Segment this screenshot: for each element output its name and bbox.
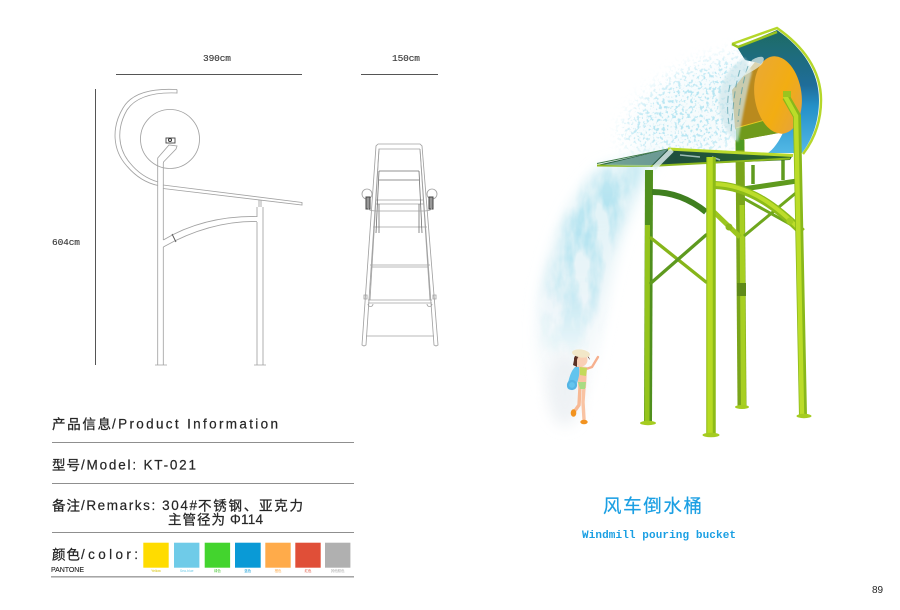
bucket disk — [749, 53, 807, 137]
curved hood outline — [115, 89, 177, 186]
bucket wheel circle — [140, 110, 200, 168]
heading: 产品信息 — [52, 416, 111, 432]
main pole — [155, 163, 167, 365]
model: 型号 — [52, 458, 80, 473]
remarks: 主管径为 — [168, 512, 225, 528]
dark arched brace — [652, 192, 706, 212]
remarks — [52, 498, 303, 528]
water shadow behind child — [547, 354, 583, 426]
deck — [597, 149, 793, 168]
left cross brace — [651, 235, 706, 283]
product illustration — [537, 28, 821, 437]
colour swatches: 绿色 — [214, 568, 221, 573]
colour swatches: 其他颜色 — [331, 568, 345, 573]
model: /Model: KT-021 — [81, 458, 196, 472]
product name: 风车倒水桶 — [603, 496, 702, 516]
second pole — [254, 200, 266, 365]
front arched brace — [714, 184, 802, 232]
child figure — [547, 348, 598, 426]
back pole — [735, 120, 749, 409]
side wheels — [362, 189, 437, 211]
colour swatches: 红色 — [305, 568, 312, 573]
side view technical drawing — [52, 53, 302, 365]
water sheet over bucket — [719, 57, 764, 142]
product information panel — [51, 416, 354, 577]
right pole and nozzle — [783, 91, 812, 418]
waterfall — [537, 150, 662, 408]
page number: 89 — [872, 585, 884, 596]
color label — [51, 546, 138, 574]
front view technical drawing — [361, 53, 438, 346]
lower diagonal brace — [714, 212, 794, 237]
product name — [582, 496, 736, 542]
colour swatches: 蓝色 — [244, 568, 252, 573]
lower fittings — [364, 295, 436, 306]
colour swatches: Sea-blue — [180, 569, 194, 573]
colour swatches: 橙色 — [275, 568, 282, 573]
colour swatches: Yellow — [151, 569, 161, 573]
heading: /Product Information — [112, 416, 278, 432]
left pole — [640, 170, 656, 425]
hood — [732, 28, 821, 154]
dimension: 150cm width: 150cm — [392, 53, 420, 64]
sloped deck — [163, 185, 302, 205]
dimension: 150cm width — [361, 53, 438, 74]
remarks: /Remarks: 304# — [81, 498, 197, 513]
hood frame darker section — [376, 171, 422, 233]
bucket body — [732, 62, 784, 140]
product name: Windmill pouring bucket — [582, 530, 736, 542]
nozzle and bearing — [158, 138, 177, 163]
rear cross brace — [743, 160, 797, 236]
color label: PANTONE — [51, 567, 84, 574]
color label: 颜色 — [52, 546, 80, 562]
remarks: 不锈钢、亚克力 — [198, 498, 303, 514]
outer frame — [362, 144, 438, 346]
colour swatches — [143, 543, 350, 573]
inner frame and rungs — [368, 149, 432, 303]
dimension: 390cm width: 390cm — [203, 53, 231, 64]
dimension: 604cm height: 604cm — [52, 237, 80, 248]
heading — [52, 416, 278, 432]
remarks: 备注 — [52, 498, 80, 514]
water spray cloud — [622, 56, 750, 152]
remarks: Φ114 — [230, 512, 264, 527]
arched brace — [163, 216, 257, 247]
front pole — [702, 157, 720, 437]
color label: /color: — [81, 547, 138, 562]
